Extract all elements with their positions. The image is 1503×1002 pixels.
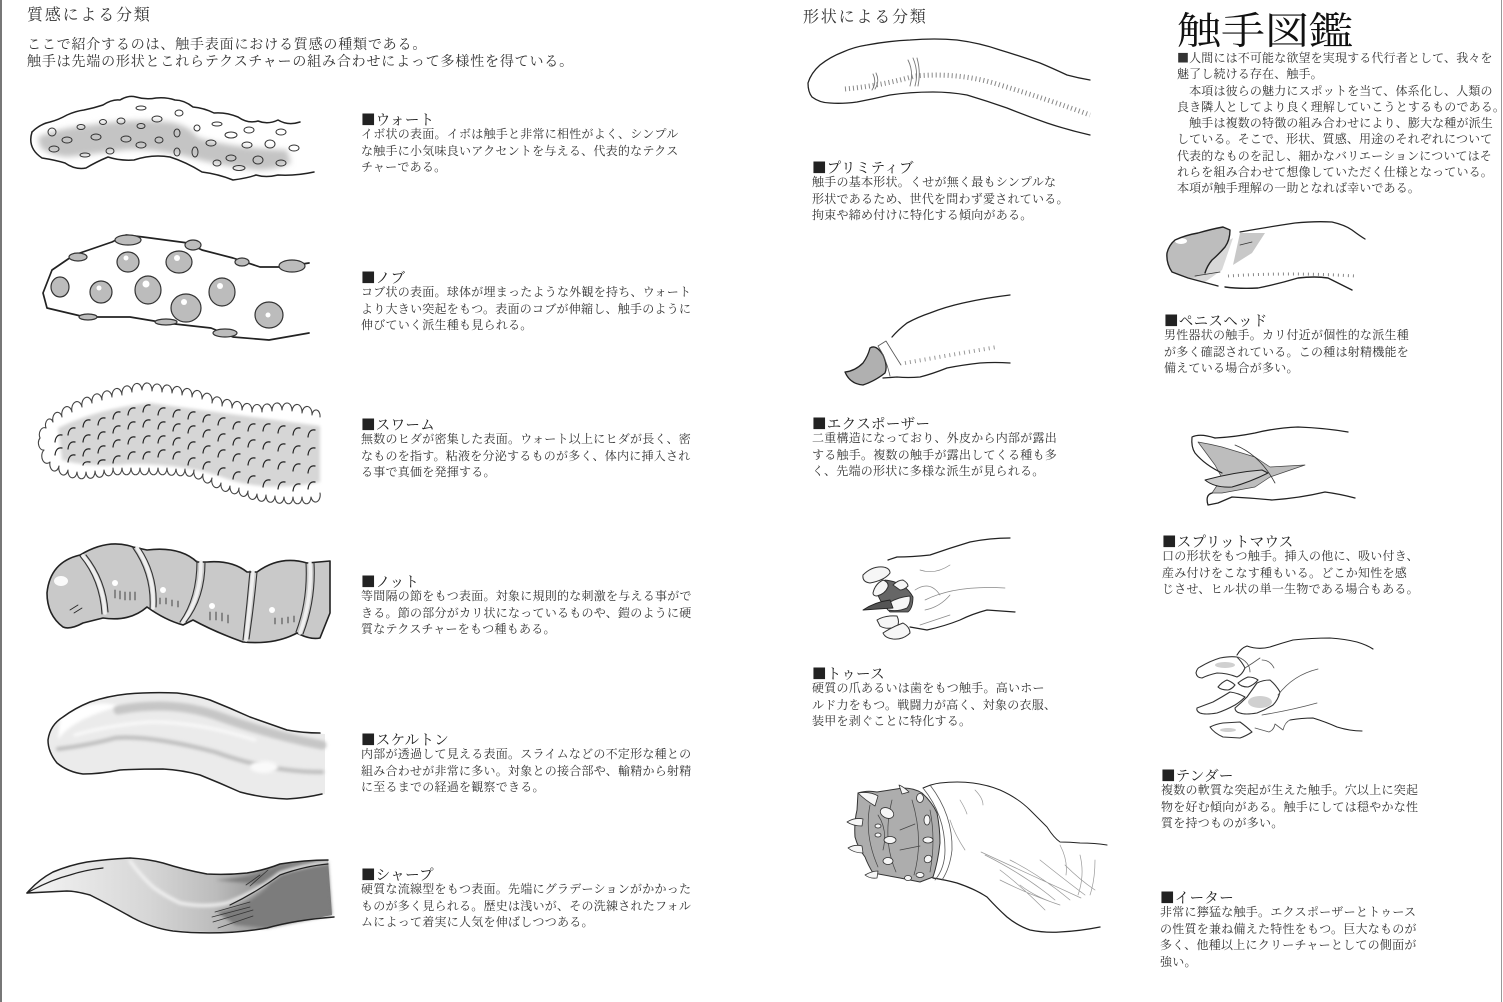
text: eater: [1160, 886, 1417, 970]
text: sharp: ■シャープ: [361, 864, 434, 884]
text: skeleton: 内部が透過して見える表面。スライムなどの不定形な種との: [361, 745, 691, 762]
text: knot: 等間隔の節をもつ表面。対象に規則的な刺激を与える事がで: [361, 587, 692, 604]
illustration: exposer tentacle: [845, 295, 1010, 385]
text: tooth: ■トゥース: [812, 662, 885, 684]
text: knot: ■ノット: [361, 570, 419, 592]
illustration: tooth tentacle: [863, 538, 1015, 639]
illustration: split mouth tentacle: [1192, 427, 1355, 505]
text: primitive: 形状であるため、世代を問わず愛されている。: [812, 190, 1069, 207]
text: eater: 多く、他種以上にクリーチャーとしての側面が: [1160, 936, 1417, 953]
text: swarm: なものを指す。粘液を分泌するものが多く、体内に挿入され: [361, 447, 691, 464]
text: penis head: が多く確認されている。この種は射精機能を: [1164, 343, 1409, 360]
text: wart: ■ウォート: [361, 108, 434, 130]
intro text: texture classification: 触手は先端の形状とこれらテクスチャーの組み合わせによって多様性を得ている。: [27, 51, 574, 71]
illustration: skeleton tentacle: [48, 693, 325, 799]
intro text: texture classification: ここで紹介するのは、触手表面における質感の種類である。: [27, 34, 427, 54]
text: swarm: る事で真価を発揮する。: [361, 463, 496, 480]
title: 触手図鑑: [1177, 0, 1353, 55]
text: tooth: [812, 662, 1056, 729]
text: sharp: [361, 864, 691, 930]
text: tender: [1161, 764, 1418, 831]
text: tender: ■テンダー: [1161, 764, 1234, 786]
illustration: wart tentacle: [31, 96, 314, 180]
illustration: eater tentacle: [847, 782, 1107, 932]
text: sharp: ムによって着実に人気を伸ばしつつある。: [361, 913, 594, 930]
text: exposer: する触手。複数の触手が露出してくる種も多: [812, 446, 1057, 463]
illustration: primitive tentacle: [808, 39, 1090, 135]
text: exposer: [812, 412, 1057, 479]
text: swarm: 無数のヒダが密集した表面。ウォート以上にヒダが長く、密: [361, 430, 691, 447]
intro text: encyclopedia: れらを組み合わせて想像していただく仕様となっている。: [1177, 163, 1493, 180]
text: eater: 強い。: [1160, 953, 1197, 970]
text: swarm: ■スワーム: [361, 414, 435, 434]
text: knob: より大きい突起をもつ。表面のコブが伸縮し、触手のように: [361, 300, 691, 317]
text: skeleton: に至るまでの経過を観察できる。: [361, 778, 545, 795]
text: penis head: [1164, 310, 1409, 376]
text: knob: コブ状の表面。球体が埋まったような外観を持ち、ウォート: [361, 283, 691, 300]
text: tooth: 硬質の爪あるいは歯をもつ触手。高いホー: [812, 679, 1045, 696]
text: penis head: 備えている場合が多い。: [1164, 359, 1299, 376]
illustration: knob tentacle: [43, 235, 309, 340]
text: wart: な触手に小気味良いアクセントを与える、代表的なテクス: [361, 142, 679, 159]
text: penis head: ■ペニスヘッド: [1164, 310, 1268, 330]
intro text: encyclopedia: している。そこで、形状、質感、用途のそれぞれについて: [1177, 130, 1492, 147]
text: exposer: 二重構造になっており、外皮から内部が露出: [812, 429, 1057, 446]
text: sharp: ものが多く見られる。歴史は浅いが、その洗練されたフォル: [361, 897, 691, 914]
text: exposer: く、先端の形状に多様な派生が見られる。: [812, 462, 1045, 479]
text: eater: ■イーター: [1160, 886, 1234, 908]
text: primitive: ■プリミティブ: [812, 156, 914, 178]
intro text: encyclopedia: ■人間には不可能な欲望を実現する代行者として、我々を: [1177, 49, 1493, 66]
text: split mouth: ■スプリットマウス: [1162, 530, 1294, 552]
text: knot: 質なテクスチャーをもつ種もある。: [361, 620, 556, 637]
intro text: encyclopedia: [1177, 49, 1503, 196]
intro text: encyclopedia: 本項が触手理解の一助となれば幸いである。: [1177, 179, 1420, 196]
text: tooth: 装甲を剥ぐことに特化する。: [812, 712, 971, 729]
left page edge: [0, 0, 2, 1002]
text: knot: [361, 570, 692, 637]
text: skeleton: 組み合わせが非常に多い。対象との接合部や、輸精から射精: [361, 762, 692, 779]
text: knob: [361, 266, 691, 333]
text: primitive: [812, 156, 1069, 223]
heading: shape classification: 形状による分類: [803, 4, 928, 27]
illustration: sharp tentacle: [27, 858, 334, 933]
text: split mouth: じさせ、ヒル状の単一生物である場合もある。: [1162, 580, 1419, 597]
text: knob: 伸びていく派生種も見られる。: [361, 316, 533, 333]
text: swarm: [361, 414, 691, 480]
text: penis head: 男性器状の触手。カリ付近が個性的な派生種: [1164, 326, 1409, 343]
text: sharp: 硬質な流線型をもつ表面。先端にグラデーションがかかった: [361, 880, 691, 897]
illustration: swarm tentacle: [38, 383, 320, 504]
text: skeleton: ■スケルトン: [361, 728, 449, 750]
text: wart: [361, 108, 679, 175]
text: tender: 複数の軟質な突起が生えた触手。穴以上に突起: [1161, 781, 1418, 798]
intro text: encyclopedia: 魅了し続ける存在、触手。: [1177, 65, 1323, 82]
intro text: encyclopedia: 良き隣人としてより良く理解していこうとするものである。: [1177, 98, 1503, 115]
text: tooth: ルド力をもつ。戦闘力が高く、対象の衣服、: [812, 696, 1056, 713]
text: split mouth: 口の形状をもつ触手。挿入の他に、吸い付き、: [1162, 547, 1419, 564]
illustration: knot tentacle: [47, 544, 330, 643]
text: eater: の性質を兼ね備えた特性をもつ。巨大なものが: [1160, 920, 1417, 937]
intro text: encyclopedia: 代表的なものを記し、細かなバリエーションについてはそ: [1177, 147, 1492, 164]
text: tender: 物を好む傾向がある。触手にしては穏やかな性: [1161, 798, 1418, 815]
text: wart: チャーである。: [361, 158, 446, 175]
text: primitive: 触手の基本形状。くせが無く最もシンプルな: [812, 173, 1056, 190]
intro text: encyclopedia: 触手は複数の特徴の組み合わせにより、膨大な種が派生: [1189, 114, 1493, 131]
intro text: encyclopedia: 本項は彼らの魅力にスポットを当て、体系化し、人類の: [1189, 82, 1493, 99]
text: tender: 質を持つものが多い。: [1161, 814, 1284, 831]
text: exposer: ■エクスポーザー: [812, 412, 930, 434]
right page edge: [1501, 0, 1502, 1002]
text: knob: ■ノブ: [361, 266, 405, 288]
heading: texture classification: 質感による分類: [27, 2, 152, 25]
text: split mouth: [1162, 530, 1419, 597]
text: split mouth: 産み付けをこなす種もいる。どこか知性を感: [1162, 564, 1407, 581]
illustration: tender tentacle: [1196, 638, 1373, 738]
text: skeleton: [361, 728, 692, 795]
text: primitive: 拘束や締め付けに特化する傾向がある。: [812, 206, 1033, 223]
text: knot: きる。節の部分がカリ状になっているものや、鎧のように硬: [361, 604, 692, 621]
text: eater: 非常に獰猛な触手。エクスポーザーとトゥース: [1160, 903, 1416, 920]
illustration: rounded-head tentacle: [1167, 222, 1365, 290]
intro text: texture classification: [27, 34, 574, 71]
text: wart: イボ状の表面。イボは触手と非常に相性がよく、シンプル: [361, 125, 678, 142]
